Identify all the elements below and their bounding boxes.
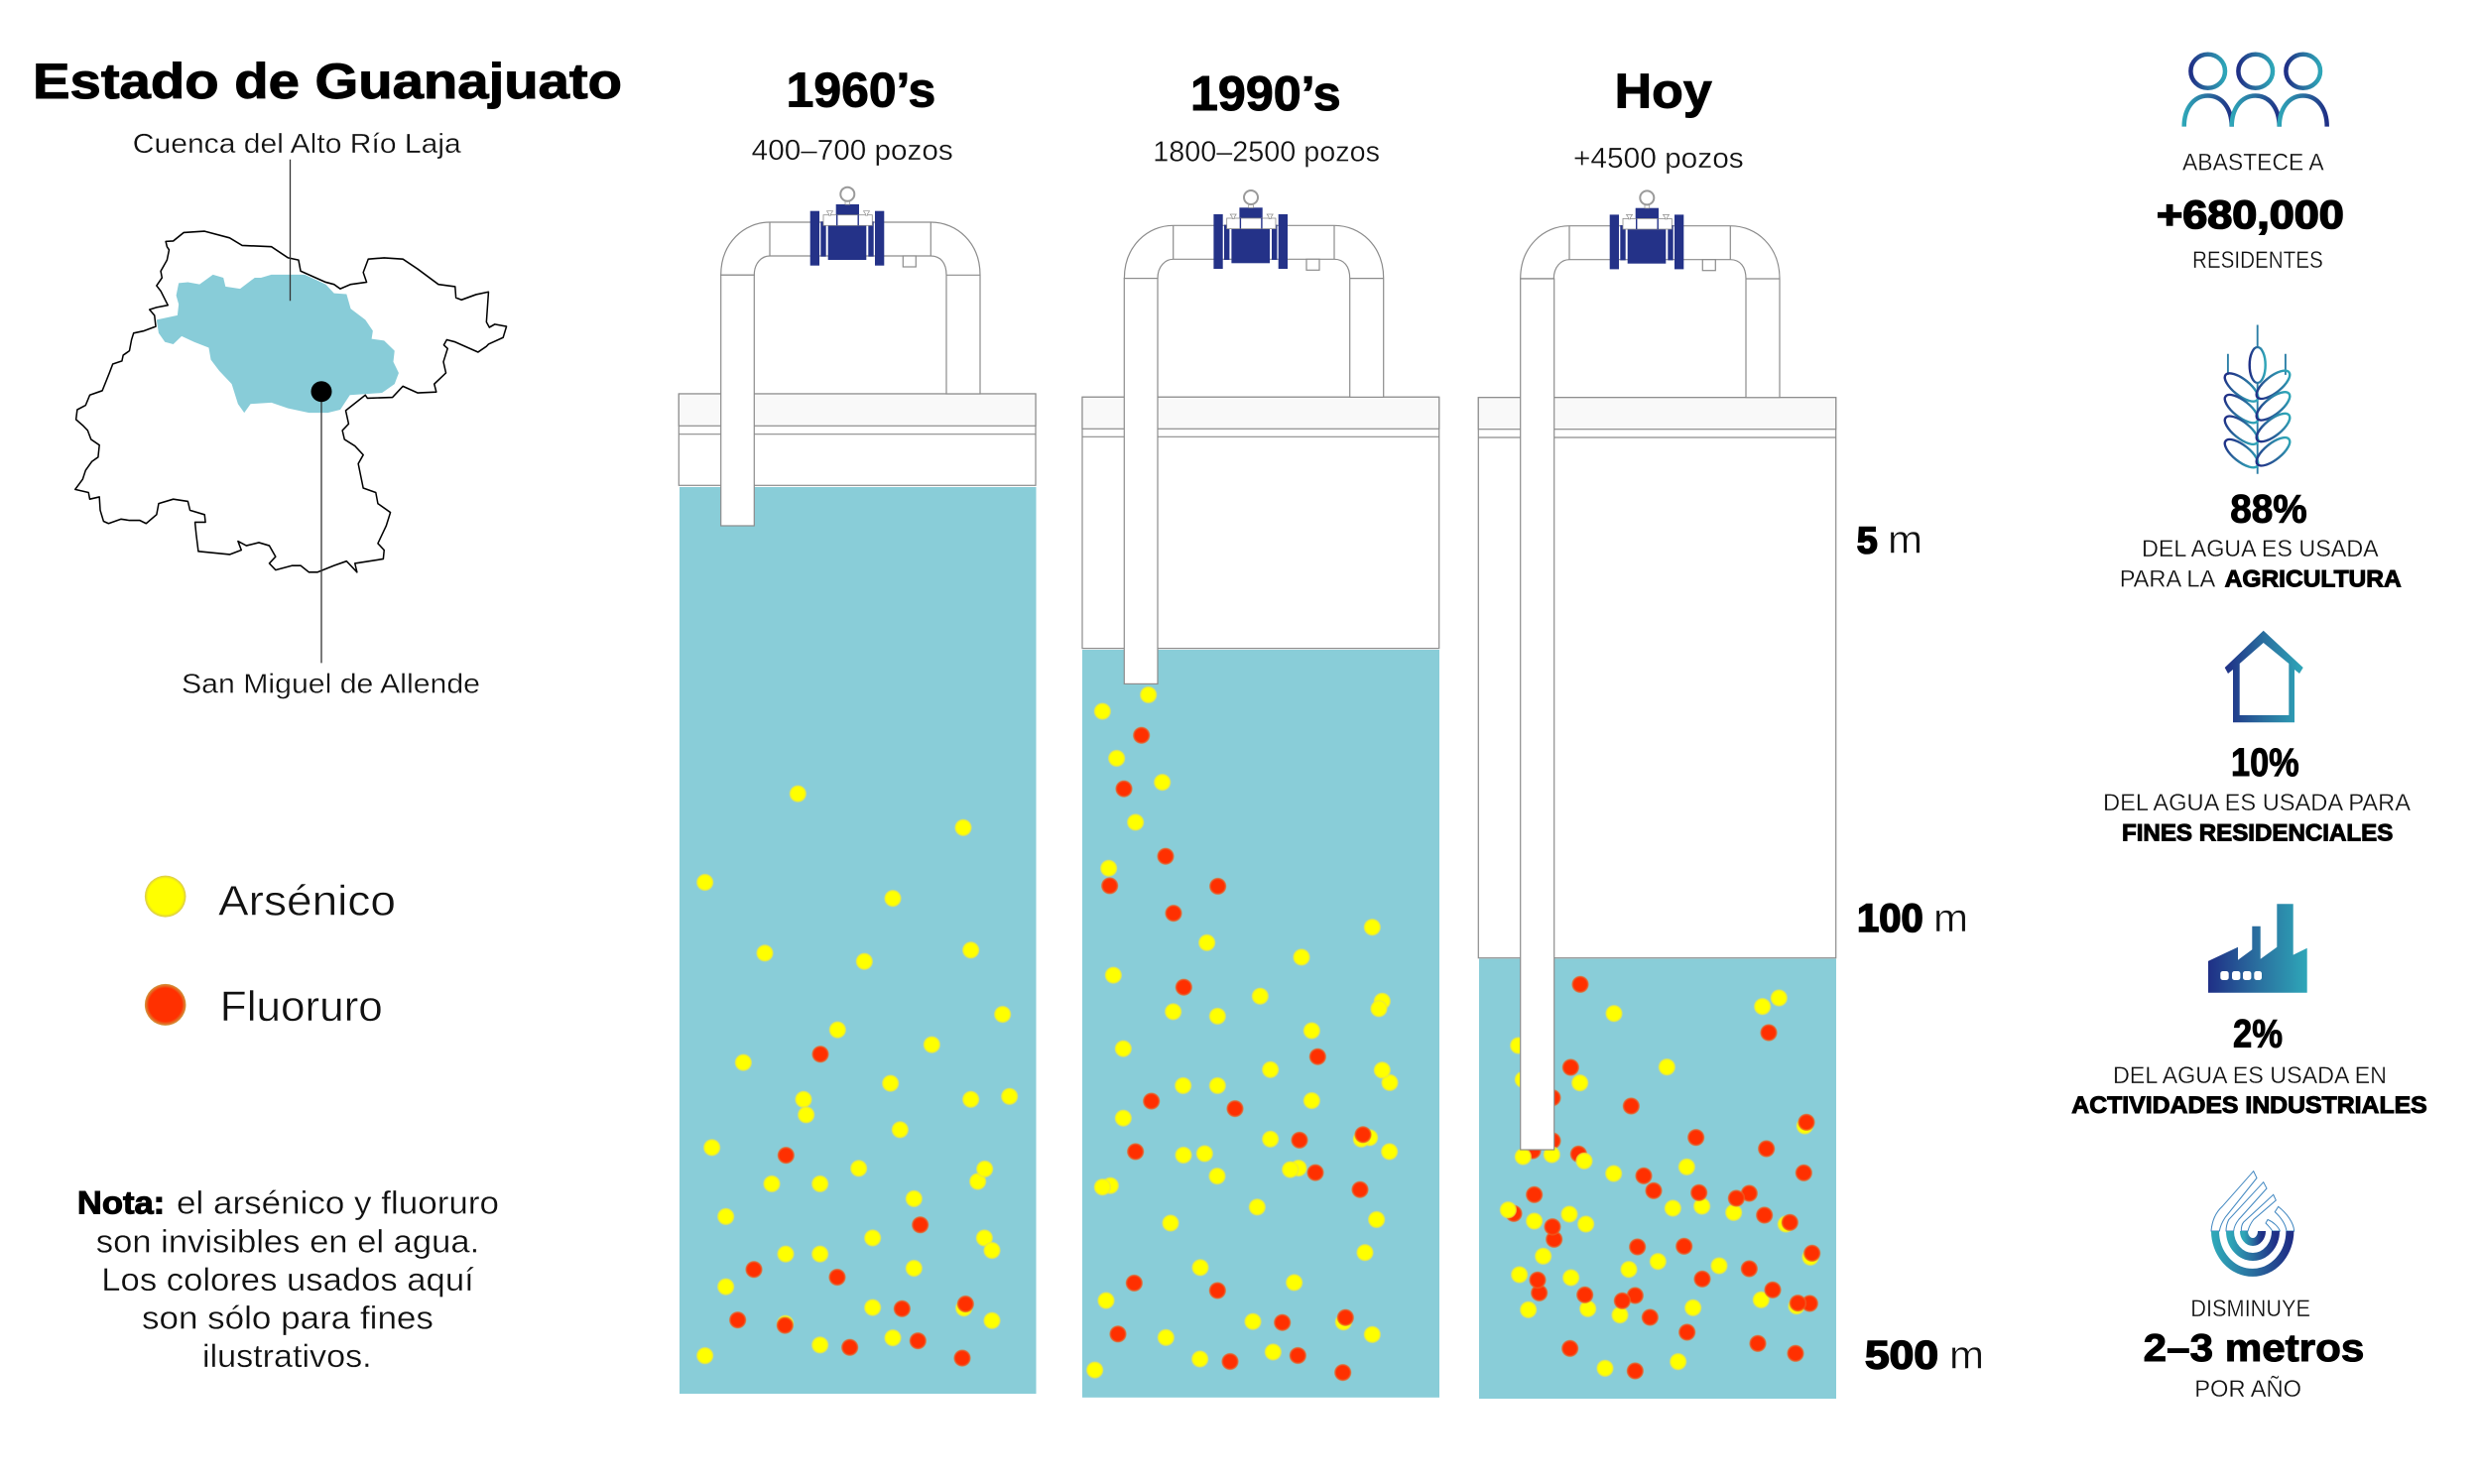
stat: agriculture: 88% [2230,487,2307,531]
well count today: +4500 pozos [1573,143,1744,175]
stat: industry [2071,904,2427,1119]
stat: residents: ABASTECE A [2182,150,2324,177]
note text: son invisibles en el agua. [96,1224,479,1260]
pipe and flow meter [1521,190,1780,398]
well count 1960s: 400–700 pozos [752,135,953,167]
stat: residential: FINES RESIDENCIALES [2122,819,2393,847]
note text: Los colores usados aquí [101,1262,474,1298]
legend label: arsenic: Arsénico [218,877,396,925]
well casing [1478,398,1836,958]
heading 1990s: 1990’s [1190,67,1341,121]
stat: residential [2103,631,2411,847]
drop pipe [1124,279,1158,683]
stat: residents: RESIDENTES [2192,247,2323,274]
depth label: 5 m: m [1888,518,1922,561]
stat: water table decline: DISMINUYE [2190,1296,2310,1322]
depth label: 100 m: 100 [1857,897,1923,940]
well casing [679,394,1036,485]
note text: el arsénico y fluoruro [177,1185,499,1221]
note text: ilustrativos. [202,1338,372,1374]
map label: basin: Cuenca del Alto Río Laja [133,128,461,159]
stat: industry: DEL AGUA ES USADA EN [2113,1062,2387,1089]
stat: residential: 10% [2231,741,2299,785]
depth label: 500 m: 500 [1865,1333,1938,1377]
title: Estado de Guanajuato [33,54,622,109]
pipe and flow meter [721,187,980,394]
panel: well today [1478,64,1836,1399]
stat: agriculture: PARA LA [2120,565,2215,592]
note text: son sólo para fines [142,1300,434,1336]
legend marker: arsenic [145,876,186,918]
depth label: 100 m [1857,897,1968,940]
map of Guanajuato [75,128,507,699]
stat: industry: ACTIVIDADES INDUSTRIALES [2071,1092,2427,1119]
contaminant dots [1086,685,1399,1382]
icon: factory [2208,904,2307,993]
icon: people [2184,55,2327,127]
stat: water table decline: 2–3 metros [2144,1327,2364,1370]
depth label: 500 m: m [1949,1333,1984,1377]
heading 1960s: 1960’s [787,63,935,117]
icon: wheat [2220,325,2294,474]
legend marker: fluoride [145,984,186,1026]
note text: Nota: [77,1185,165,1221]
well casing [1082,397,1439,649]
legend [145,876,396,1031]
stat: agriculture: DEL AGUA ES USADA [2142,536,2379,562]
note text [77,1185,499,1374]
basin shape [157,275,399,413]
stat: residents [2157,55,2344,274]
stat: water table decline [2144,1172,2364,1403]
depth label: 5 m: 5 [1857,520,1878,561]
stat: industry: 2% [2233,1013,2283,1056]
stat: agriculture [2120,325,2402,592]
depth label: 100 m: m [1933,897,1968,940]
stat: water table decline: POR AÑO [2194,1376,2301,1403]
icon: water drop [2211,1172,2294,1273]
state outline [75,231,507,572]
depth label: 500 m [1865,1333,1984,1377]
legend label: fluoride: Fluoruro [220,983,383,1031]
depth label: 5 m [1857,518,1922,561]
stat: residents: +680,000 [2157,193,2344,237]
city dot [311,381,331,402]
leader line: San Miguel [320,392,322,663]
well count 1990s: 1800–2500 pozos [1153,136,1380,168]
drop pipe [721,275,754,526]
water [680,487,1036,1394]
panel: well 1990s [1082,67,1439,1398]
icon: house [2225,631,2303,722]
map label: city: San Miguel de Allende [182,669,480,699]
panel: well 1960s [679,63,1036,1394]
water [1082,650,1439,1398]
water [1479,958,1836,1399]
stat: residential: DEL AGUA ES USADA PARA [2103,790,2411,816]
stat: agriculture: AGRICULTURA [2225,565,2402,592]
contaminant dots [1499,975,1821,1380]
pipe and flow meter [1124,190,1384,397]
contaminant dots [696,785,1019,1367]
drop pipe [1521,279,1554,1150]
leader line: basin [290,160,292,301]
heading today: Hoy [1615,64,1712,118]
